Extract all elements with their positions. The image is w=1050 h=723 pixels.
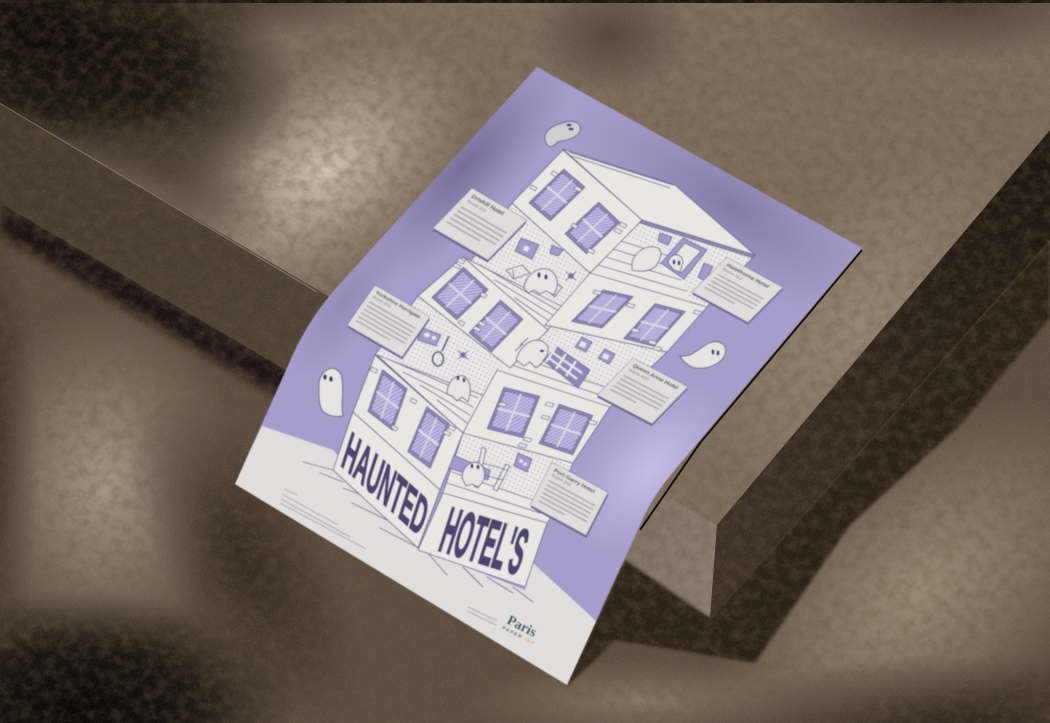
ghost, bottom floor [462,462,485,487]
picture frames [418,233,713,472]
credit line [467,607,497,625]
floor interior: upper left [463,203,590,330]
footer notes [280,489,366,549]
door with ghost [661,238,707,279]
windows [368,169,685,468]
panel: Port Garry Hotel [529,462,609,538]
panel: Driskill Hotel [431,188,528,263]
stone slab top surface [0,0,1050,530]
heading: Hawthorne Hotel: Hawthorne Hotel [725,263,770,290]
body text rules [539,481,595,526]
roof [563,149,755,258]
room number: Room 612 [721,267,744,281]
floor interior: bottom right [443,433,573,523]
building [333,149,755,587]
body text rules [704,274,764,312]
wall: third floor left [418,257,548,368]
paper shading and ground [234,70,846,686]
stone slab right face [710,130,1050,618]
wall: HAUNTED [333,412,440,548]
room number: Room 410 [627,368,650,381]
poster edge shadow [640,250,862,530]
ghost: left [319,368,343,416]
title: HAUNTED HOTEL'S [336,420,536,589]
title word: HAUNTED: HAUNTED [336,420,434,548]
wall: roof level [512,150,642,273]
title word: HOTEL'S: HOTEL'S [432,495,536,589]
floor interior: middle right [497,325,667,407]
heading: Yorkshire Harrigate: Yorkshire Harrigate [374,290,422,320]
logo word: Paris: Paris [504,613,539,641]
wall: first floor left [353,355,463,490]
body text rules [447,207,507,248]
heading: Queen Anne Hotel: Queen Anne Hotel [631,364,680,391]
poster sheet [235,67,862,685]
room number: Room 202 [551,473,573,488]
panel: Yorkshire Harrigate [346,285,431,360]
body text rules [356,302,415,347]
ghost by the door, top floor [632,247,661,271]
noose [432,336,449,366]
logo: Paris Paper + Ink [501,613,543,646]
panel: Hawthorne Hotel [690,257,784,325]
heading: Driskill Hotel: Driskill Hotel [469,194,505,217]
stone slab front face [0,103,717,618]
bricks [370,171,702,448]
floor interior: top right [590,220,753,309]
spiders [458,272,576,359]
wall: second floor right [463,370,610,463]
panel: Queen Anne Hotel [595,358,689,426]
room number: Room 333 [372,294,392,309]
floor interior: lower left [375,296,510,433]
ghost and gifts, upper floor [506,265,562,297]
ghost, lower left floor [447,376,470,402]
slab shadow on ground [565,240,1050,688]
wall: third floor right [545,273,707,352]
poster: Haunted Hotel's [234,66,862,686]
wall: HOTEL'S [418,493,547,587]
ghost and dresser [515,338,590,388]
ghost: top [545,121,580,147]
heading: Port Garry Hotel: Port Garry Hotel [553,468,596,495]
room number: Room 315 [465,199,488,214]
logo sub-line: PAPER INK [501,625,537,646]
body text rules [610,375,669,413]
ghost: right [680,342,725,368]
